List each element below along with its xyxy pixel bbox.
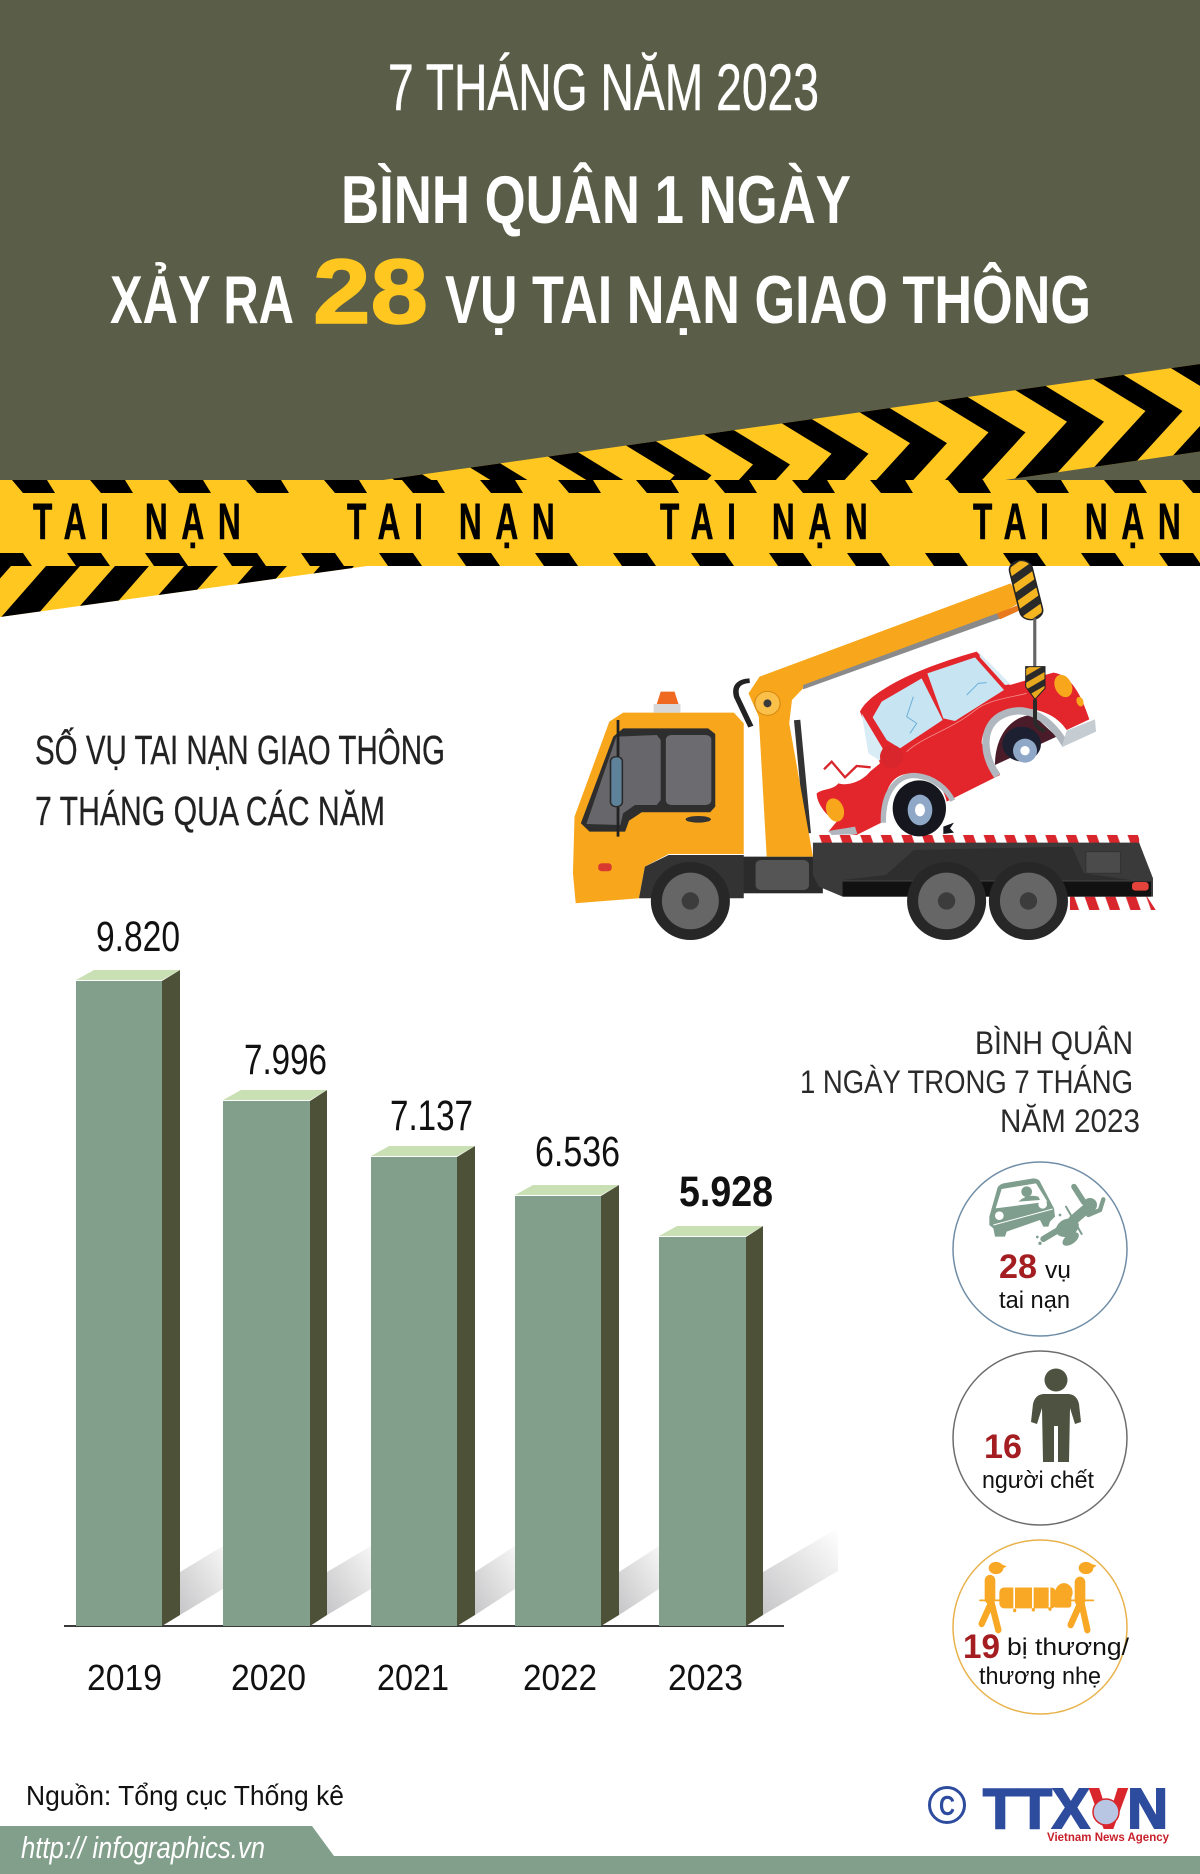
truck wheels xyxy=(651,862,1068,940)
year labels: 2021 xyxy=(377,1657,449,1698)
label tai nạn: tai nạn xyxy=(999,1287,1070,1314)
value labels: 9.820 xyxy=(96,913,180,961)
rear red and white guard xyxy=(1070,897,1156,910)
title line 2: BÌNH QUÂN 1 NGÀY xyxy=(341,161,851,238)
cable xyxy=(1031,618,1039,667)
year labels: 2020 xyxy=(231,1657,306,1698)
cab xyxy=(573,713,744,903)
value labels: 5.928 xyxy=(679,1168,773,1216)
value labels: 6.536 xyxy=(535,1128,620,1176)
chart heading: SỐ VỤ TAI NẠN GIAO THÔNG xyxy=(35,727,445,773)
daily average heading xyxy=(800,1025,1140,1139)
car body xyxy=(817,652,1089,835)
body highlights xyxy=(907,693,1027,752)
beacon xyxy=(654,704,680,713)
bar 2022 xyxy=(515,1185,619,1626)
highlight number 28: 28 xyxy=(313,241,428,343)
bar 2019 xyxy=(76,970,180,1626)
tape label 3: TAI NẠN xyxy=(660,493,881,550)
globe xyxy=(1093,1799,1119,1825)
car front wheel xyxy=(893,780,946,836)
tape label 1: TAI NẠN xyxy=(33,493,254,550)
logo: TTXVN xyxy=(930,1777,1169,1844)
lower-left hazard ribbon xyxy=(0,566,367,617)
panel: 28 accidents xyxy=(953,1162,1127,1336)
bar chart xyxy=(64,913,838,1698)
year labels: 2019 xyxy=(87,1657,162,1698)
bar 2021 xyxy=(371,1146,475,1626)
bent wire xyxy=(824,762,871,777)
illustration: tow truck lifting a crashed red car xyxy=(573,559,1156,940)
crane hook block xyxy=(1007,559,1045,621)
diagonal chevron hazard ribbon xyxy=(383,364,1200,480)
stretcher xyxy=(999,1587,1056,1608)
value labels: 7.137 xyxy=(390,1092,473,1140)
header panel xyxy=(0,0,1200,482)
value labels: 7.996 xyxy=(244,1036,327,1084)
value 28: 28 xyxy=(999,1248,1037,1286)
warning tape band xyxy=(0,480,1200,566)
mirror and door handle xyxy=(615,720,622,837)
cast shadows xyxy=(180,1528,838,1615)
windscreen cracks xyxy=(907,697,917,733)
car lights xyxy=(1051,672,1076,700)
car windows xyxy=(873,678,943,748)
daily average heading: BÌNH QUÂN xyxy=(975,1025,1133,1061)
title line 1: 7 THÁNG NĂM 2023 xyxy=(388,50,819,124)
tow hook block xyxy=(1026,667,1045,731)
agency name: TTXVN xyxy=(983,1777,1168,1841)
flatbed deck xyxy=(813,843,1153,897)
tape label 4: TAI NẠN xyxy=(973,493,1194,550)
chart heading xyxy=(35,727,445,834)
chart heading: 7 THÁNG QUA CÁC NĂM xyxy=(35,788,385,834)
tow truck xyxy=(573,559,1156,940)
year labels: 2022 xyxy=(523,1657,597,1698)
year labels: 2023 xyxy=(668,1657,743,1698)
label thương nhẹ: thương nhẹ xyxy=(979,1663,1101,1690)
label vụ: vụ xyxy=(1045,1257,1071,1284)
copyright mark: C xyxy=(939,1790,955,1821)
red car xyxy=(817,652,1096,836)
label người chết: người chết xyxy=(982,1467,1094,1494)
chassis xyxy=(740,857,823,893)
wheel arches and bumper xyxy=(883,776,953,823)
year labels xyxy=(87,1657,743,1698)
copyright mark xyxy=(930,1788,964,1822)
cab window xyxy=(581,728,715,832)
right carrier xyxy=(1079,1562,1093,1574)
daily average heading: 1 NGÀY TRONG 7 THÁNG xyxy=(800,1064,1133,1100)
icon: car hitting motorbike xyxy=(989,1178,1103,1248)
value labels xyxy=(96,913,773,1216)
agency tagline: Vietnam News Agency xyxy=(1047,1830,1169,1844)
axis line xyxy=(64,1625,784,1627)
daily average heading: NĂM 2023 xyxy=(1000,1103,1140,1139)
bar 2020 xyxy=(223,1090,327,1626)
value 16: 16 xyxy=(984,1428,1022,1466)
crane boom and column xyxy=(748,583,1023,857)
value 19: 19 xyxy=(963,1628,1000,1666)
flatbed stripes xyxy=(813,835,1139,843)
bar 2023 xyxy=(659,1226,763,1626)
icon: two people carrying stretcher xyxy=(980,1562,1097,1630)
footer bar xyxy=(0,1826,1200,1874)
label bị thương: bị thương/ xyxy=(1007,1634,1129,1661)
hydraulic arms xyxy=(736,681,751,727)
panel: 19 injured xyxy=(953,1540,1129,1714)
tape label 2: TAI NẠN xyxy=(347,493,568,550)
side mirror xyxy=(880,745,903,768)
left carrier xyxy=(989,1562,1003,1574)
title xyxy=(110,50,1091,343)
car rear wheel well xyxy=(995,715,1057,765)
source note: Nguồn: Tổng cục Thống kê xyxy=(26,1780,344,1811)
icon: person xyxy=(1031,1368,1081,1462)
panel: 16 deaths xyxy=(953,1351,1127,1525)
website link: http:// infographics.vn xyxy=(21,1830,265,1865)
title line 3 left: XẢY RA xyxy=(110,261,294,338)
